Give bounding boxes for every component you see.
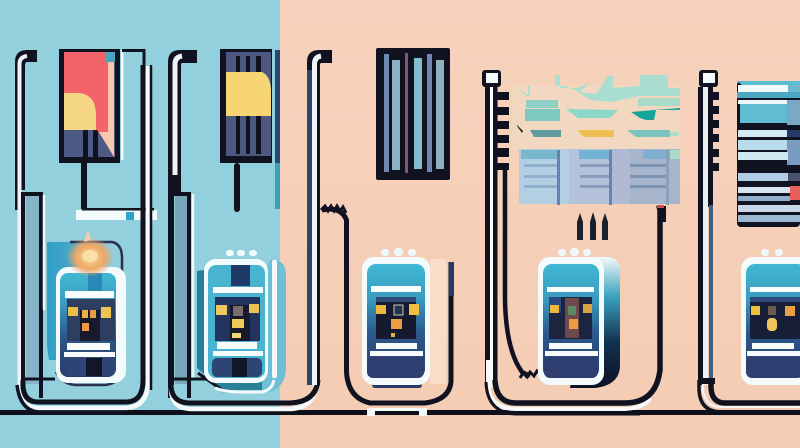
post and crossbar under red board	[76, 163, 157, 220]
panel: yellow band solar board	[220, 49, 280, 212]
ground line	[0, 410, 800, 415]
three upward arrows	[577, 212, 608, 240]
tower pole 4 with cable to kiosk 4	[482, 70, 666, 414]
kiosk 4 with dark side	[538, 248, 620, 388]
kiosk 2	[197, 250, 286, 393]
cable around kiosk 3	[321, 206, 454, 416]
kiosk 5 cropped at right edge	[741, 249, 800, 385]
pole 1 with cable loop	[15, 50, 151, 412]
pole 3	[307, 50, 332, 385]
kiosk 1 with glow	[47, 229, 126, 385]
tower pole 5	[698, 70, 800, 412]
kiosk 3	[362, 248, 446, 388]
pole 2 with cable loop	[168, 50, 318, 409]
panel: red and yellow solar board	[59, 49, 124, 163]
panel: dark striped board	[376, 48, 450, 180]
panel: stacked layers on the right	[737, 81, 800, 227]
panel: pale data board	[512, 75, 680, 205]
